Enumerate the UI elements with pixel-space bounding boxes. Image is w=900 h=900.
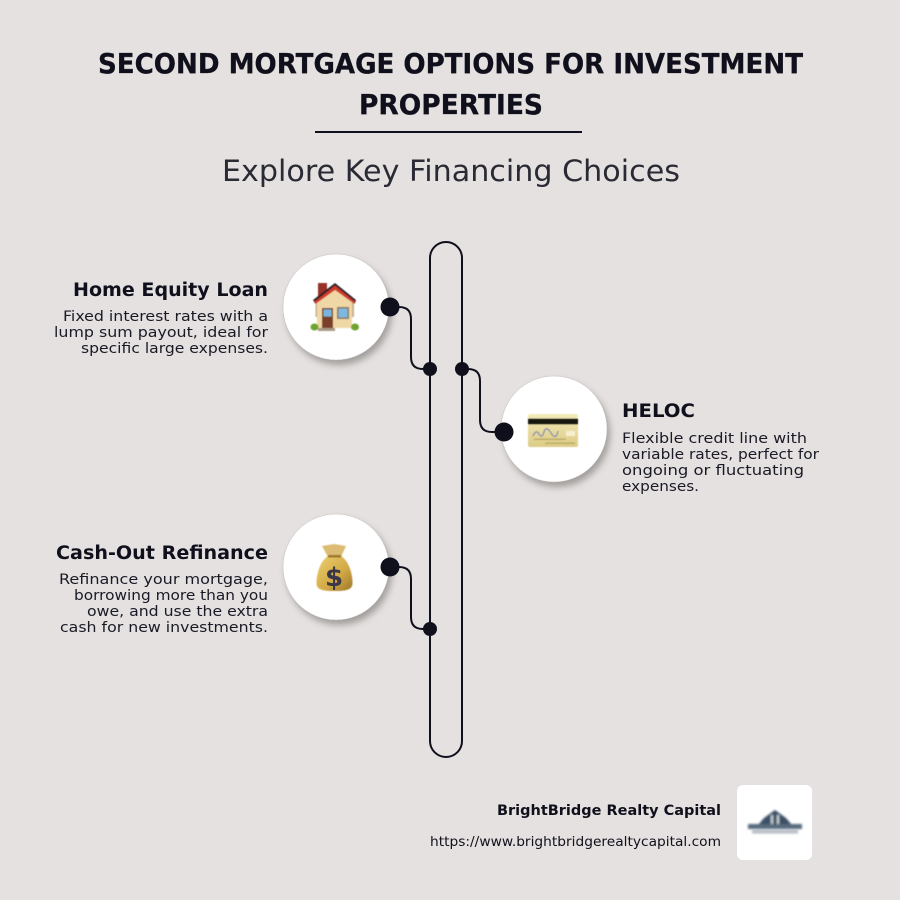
text: home equity loan description [54, 309, 268, 357]
panel: heloc [494, 376, 819, 495]
connector: cash-out refinance [390, 567, 437, 636]
icon: credit card in circle [501, 376, 610, 487]
footer: website url: https://www.brightbridgerealtycapital.com [430, 835, 721, 850]
heading: cash-out refinance: Cash-Out Refinance [56, 543, 268, 564]
connector dot: cash-out refinance [380, 558, 400, 576]
connector: heloc [455, 362, 504, 432]
subtitle: Explore Key Financing Choices [222, 154, 680, 188]
text: home equity loan description: Fixed interest rates with a [63, 309, 268, 325]
title: SECOND MORTGAGE OPTIONS FOR INVESTMENT [98, 48, 803, 80]
central timeline track [430, 242, 462, 757]
footer: company name: BrightBridge Realty Capital [497, 803, 721, 819]
icon: house in circle [283, 254, 392, 365]
text: cash-out refinance description: Refinance your mortgage, [59, 572, 268, 588]
text: heloc description: Flexible credit line with [622, 431, 807, 447]
text: heloc description: variable rates, perfect for [622, 447, 819, 463]
text: cash-out refinance description: owe, and use the extra [87, 604, 268, 620]
panel: home equity loan [54, 254, 400, 365]
icon: money bag in circle: $ [325, 563, 343, 593]
connector: home equity loan [390, 307, 437, 376]
text: cash-out refinance description [59, 572, 268, 636]
heading: home equity loan: Home Equity Loan [73, 280, 268, 301]
panel: cash-out refinance [56, 514, 400, 636]
text: home equity loan description: specific large expenses. [81, 341, 268, 357]
connector dot: heloc [494, 422, 514, 442]
text: cash-out refinance description: borrowing more than you [74, 588, 268, 604]
text: heloc description [622, 431, 819, 495]
text: cash-out refinance description: cash for new investments. [60, 620, 268, 636]
text: home equity loan description: lump sum payout, ideal for [54, 325, 268, 341]
heading: heloc: HELOC [622, 401, 695, 422]
title [98, 48, 803, 121]
title: PROPERTIES [359, 89, 543, 121]
text: heloc description: expenses. [622, 479, 699, 495]
text: heloc description: ongoing or fluctuating [622, 463, 804, 479]
logo [737, 785, 812, 860]
icon: money bag in circle [283, 514, 392, 625]
connector dot: home equity loan [380, 298, 400, 316]
